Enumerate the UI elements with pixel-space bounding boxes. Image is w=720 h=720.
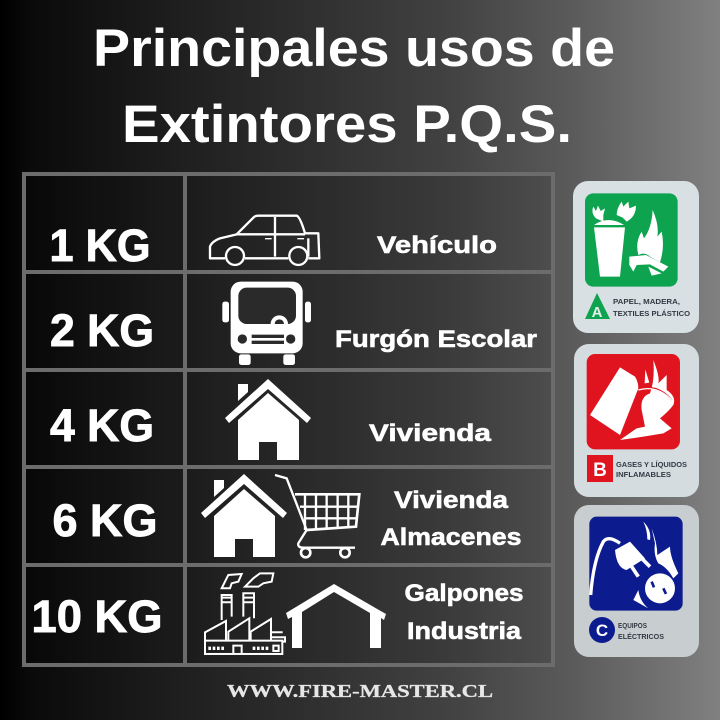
icon: house with cart bbox=[201, 474, 359, 557]
title: Extintores P.Q.S. bbox=[122, 95, 572, 154]
icon: triangle A bbox=[585, 293, 610, 321]
label: Galpones Industria: Industria bbox=[407, 618, 522, 645]
row 3 weight: 4 KG: 4 KG bbox=[50, 400, 154, 451]
caption A: TEXTILES PLÁSTICO bbox=[613, 309, 690, 318]
title: Principales usos de bbox=[93, 19, 615, 78]
label: Vivienda Almacenes: Almacenes bbox=[380, 524, 522, 551]
label: Furgón Escolar: Furgón Escolar bbox=[335, 326, 537, 353]
row 2 weight: 2 KG: 2 KG bbox=[50, 305, 154, 356]
website footer: WWW.FIRE-MASTER.CL bbox=[227, 681, 493, 701]
icon: letter B box bbox=[587, 455, 613, 482]
caption B bbox=[616, 460, 687, 479]
icon: triangle A: A bbox=[592, 304, 603, 321]
icon: bus bbox=[222, 282, 311, 365]
title bbox=[93, 19, 615, 154]
icon: circle C bbox=[589, 617, 615, 643]
icon: circle C: C bbox=[596, 621, 608, 640]
panel: class A sign bbox=[573, 181, 699, 333]
icon: letter B box: B bbox=[593, 460, 607, 481]
row 1 weight: 1 KG: 1 KG bbox=[50, 220, 150, 271]
label: Vivienda Almacenes: Vivienda bbox=[394, 487, 509, 514]
caption B: GASES Y LÍQUIDOS bbox=[616, 460, 687, 469]
caption A: PAPEL, MADERA, bbox=[613, 297, 680, 306]
icon: red can fire bbox=[587, 354, 680, 449]
icon: factory and warehouse bbox=[205, 573, 386, 654]
caption C: EQUIPOS bbox=[618, 621, 647, 630]
icon: house bbox=[225, 379, 311, 460]
caption C: ELÉCTRICOS bbox=[618, 632, 664, 641]
row 5 weight: 10 KG: 10 KG bbox=[32, 591, 162, 642]
icon: blue plug fire bbox=[589, 517, 683, 611]
table bbox=[22, 172, 555, 667]
label: Vivienda Almacenes bbox=[380, 487, 522, 551]
row 4 weight: 6 KG: 6 KG bbox=[52, 495, 158, 546]
caption A bbox=[613, 297, 690, 318]
panel: class B sign bbox=[574, 344, 699, 497]
icon: car bbox=[210, 216, 319, 265]
label: Galpones Industria: Galpones bbox=[404, 580, 524, 607]
icon: green trash bin fire bbox=[585, 193, 678, 287]
panel: class C sign bbox=[574, 505, 699, 657]
label: Vivienda: Vivienda bbox=[369, 420, 492, 447]
label: Vehículo: Vehículo bbox=[377, 232, 497, 259]
caption C bbox=[618, 621, 664, 641]
caption B: INFLAMABLES bbox=[616, 470, 671, 479]
label: Galpones Industria bbox=[404, 580, 524, 645]
